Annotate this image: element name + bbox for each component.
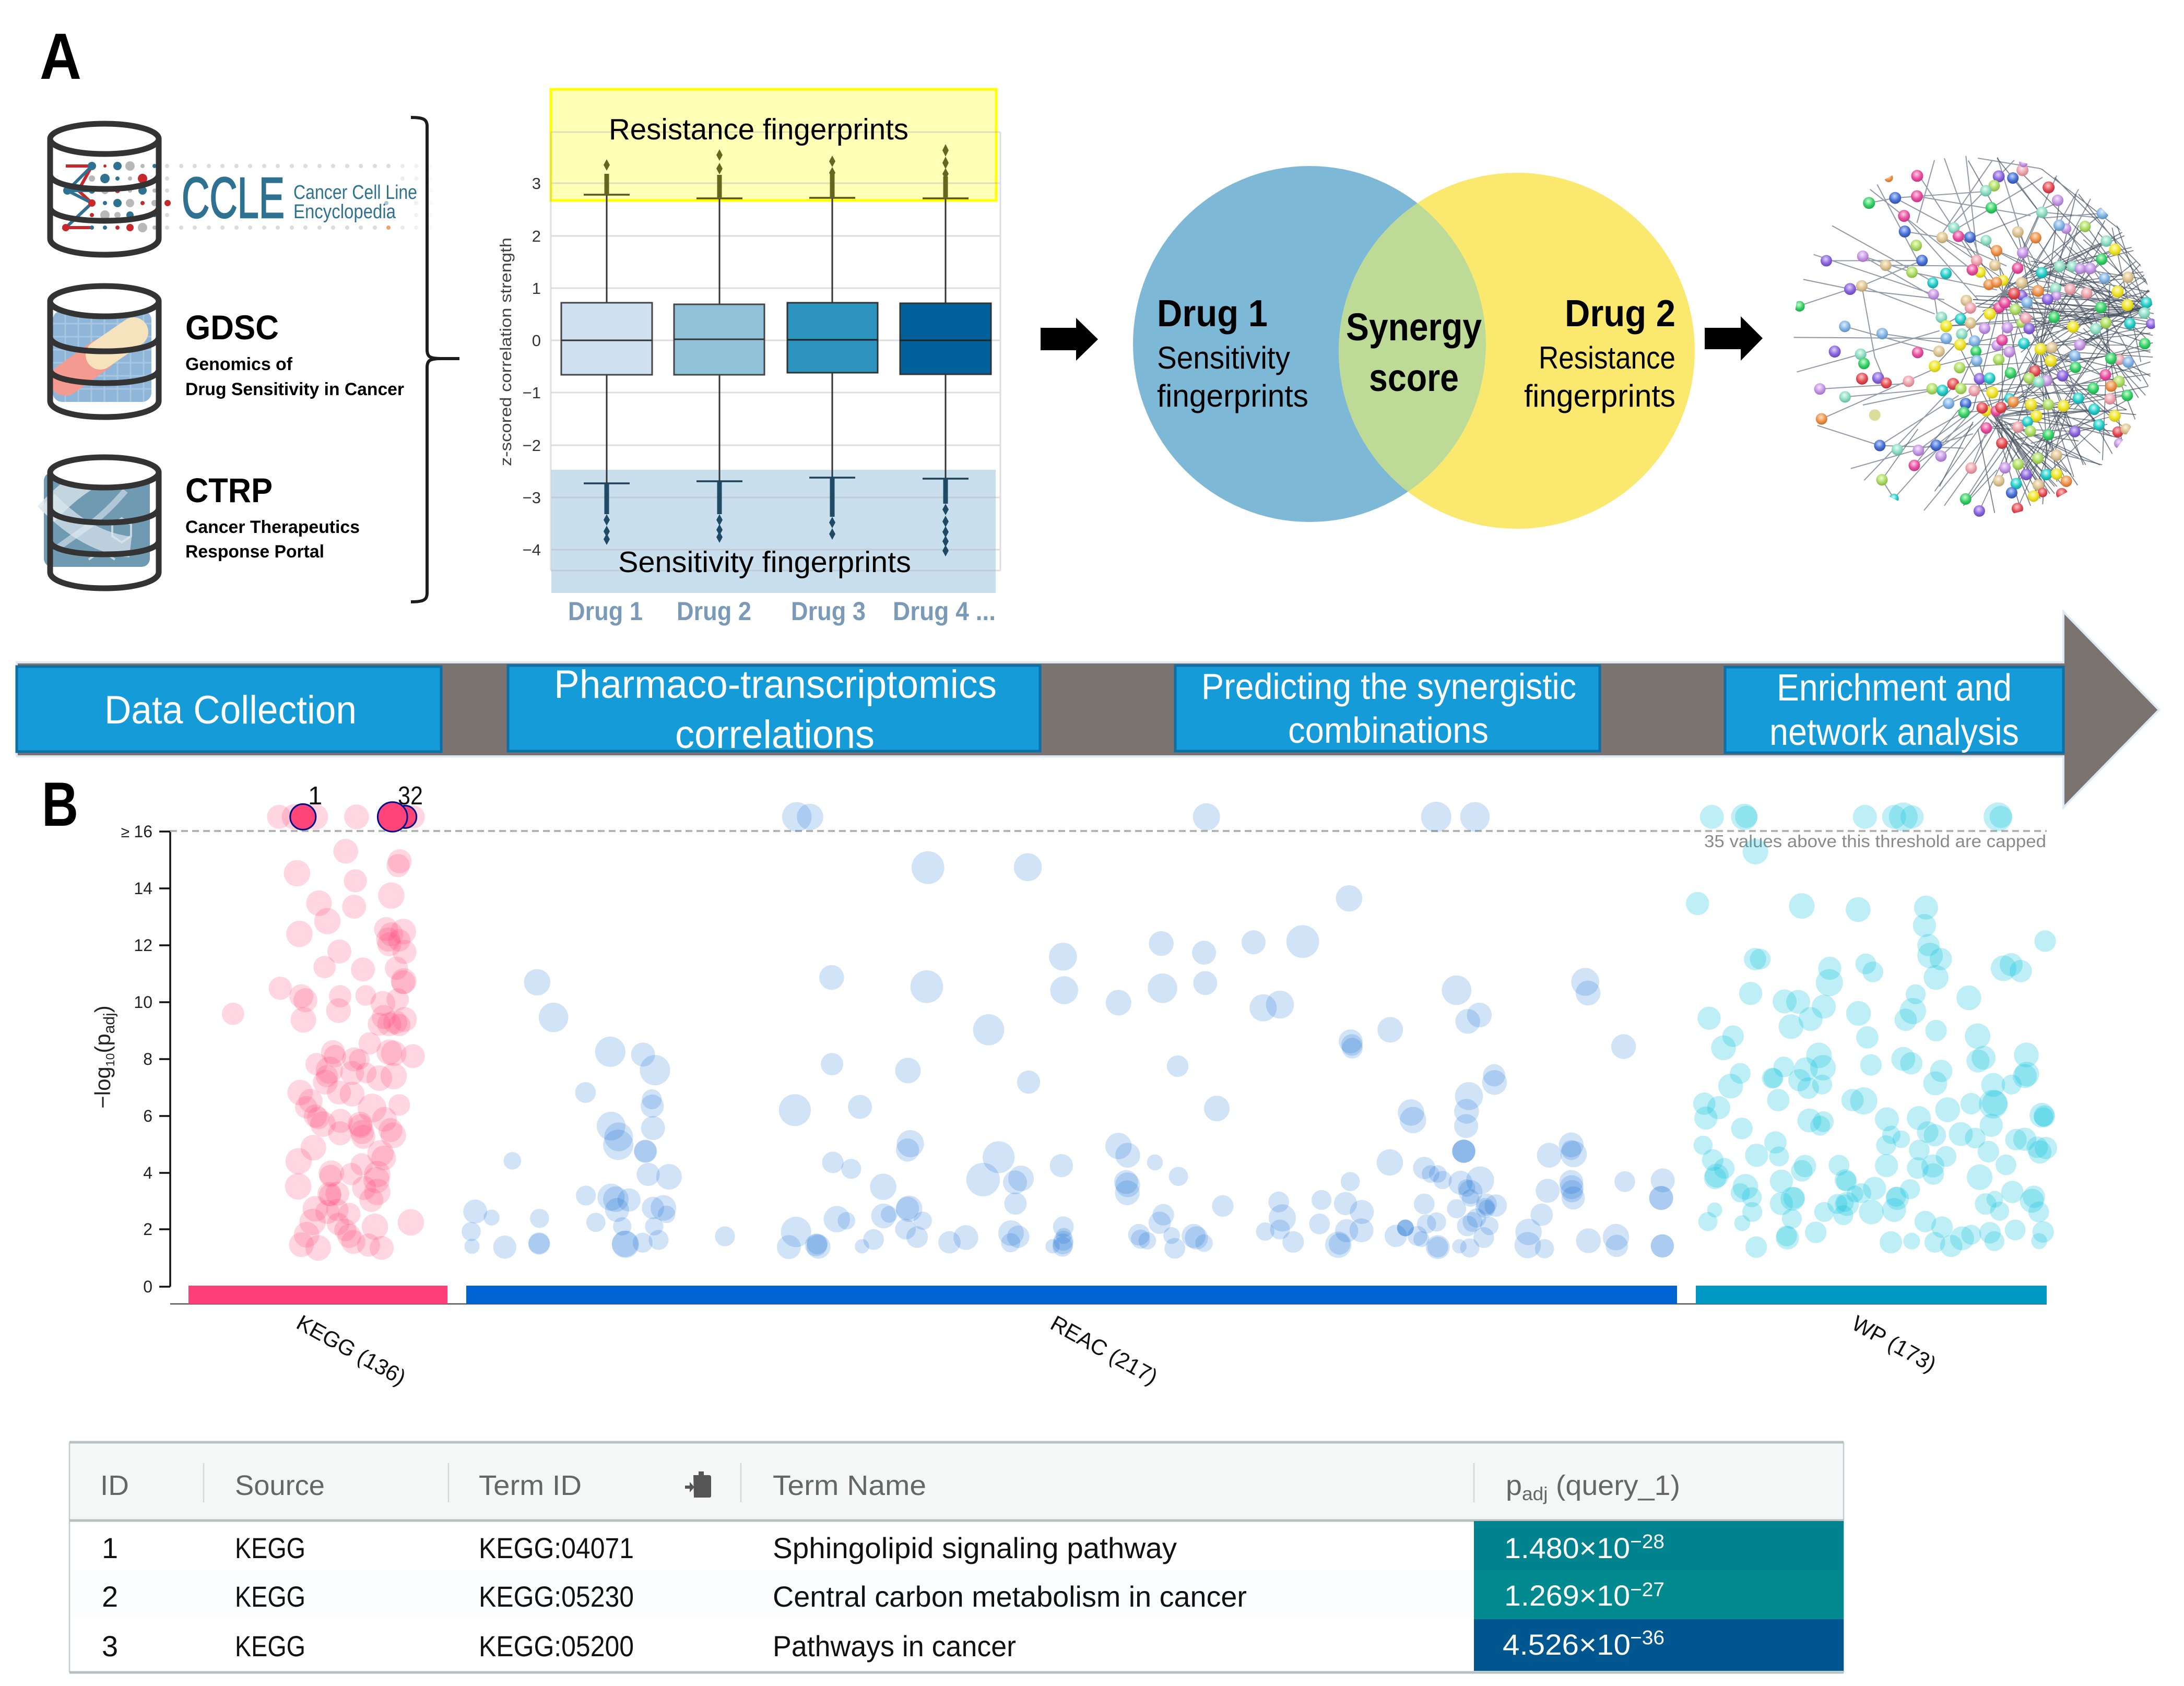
p-value cell row 1: 1.480×10: [1504, 1531, 1630, 1564]
REAC points, middle: [805, 803, 1430, 1258]
y axis tick labels: 0: [532, 331, 541, 350]
table header row: (query_1): [1548, 1470, 1680, 1501]
x axis drug labels: Drug 3: [791, 597, 866, 626]
synergy score label: score: [1369, 356, 1459, 399]
row 1: [102, 1531, 1177, 1564]
drug 1 label: Sensitivity: [1157, 340, 1290, 375]
highlighted row background: [69, 1570, 1474, 1618]
capped threshold line: [170, 830, 2047, 832]
x label: REAC: REAC (217): [1047, 1311, 1162, 1390]
y axis tick labels: −4: [523, 541, 541, 559]
y axis: 8: [143, 1050, 152, 1068]
row 1: Sphingolipid signaling pathway: [773, 1531, 1177, 1564]
drug 2 label: Resistance: [1539, 340, 1675, 375]
p-value cell row 2: 1.269×10: [1504, 1579, 1630, 1612]
synergy overlap: [1339, 203, 1486, 492]
step: enrichment and network analysis: Enrichment and: [1777, 667, 2012, 709]
drug 2 circle: [1339, 173, 1695, 529]
step: data collection: [17, 667, 441, 752]
drug 1 label: fingerprints: [1157, 378, 1308, 413]
step: enrichment and network analysis: [1725, 667, 2063, 753]
p-value cell row 3: 4.526×10: [1503, 1628, 1631, 1661]
REAC points, right: [1413, 802, 1675, 1259]
y axis title: adj: [101, 1013, 118, 1034]
box: drug 1: [561, 303, 652, 375]
table header row: adj: [1522, 1483, 1548, 1504]
panel label B: B: [42, 769, 78, 839]
arrow: venn to network: [1705, 316, 1763, 361]
table header row: p: [1506, 1470, 1521, 1501]
row 2: 2: [102, 1580, 118, 1613]
icon: GDSC pill image: [53, 311, 151, 402]
icon: CCLE dotted logo background: [62, 161, 432, 232]
y axis: 6: [143, 1107, 152, 1125]
row 3: 3: [102, 1630, 118, 1663]
x axis drug labels: Drug 2: [677, 597, 751, 626]
panel label A: A: [40, 20, 81, 93]
p-value cell row 3: −36: [1630, 1627, 1664, 1649]
drug 2 label: fingerprints: [1524, 378, 1675, 413]
panel: data sources: [44, 117, 459, 602]
table header row: [100, 1470, 1680, 1504]
CCLE full name line 2: Encyclopedia: [293, 201, 396, 223]
icon: CTRP database cylinder: [50, 457, 159, 588]
y axis title: (p: [90, 1034, 115, 1053]
y axis tick labels: 2: [532, 227, 541, 245]
row 2: Central carbon metabolism in cancer: [773, 1580, 1247, 1613]
REAC points: [462, 802, 823, 1259]
drug 1 label: Drug 1: [1157, 293, 1268, 335]
box: drug 2: [674, 304, 764, 375]
sensitivity fingerprints highlight: [551, 470, 996, 593]
y axis: [121, 822, 170, 1296]
workflow banner arrow: [17, 612, 2159, 808]
y axis: 12: [134, 936, 152, 955]
chart: enrichment Manhattan plot: [90, 782, 2057, 1390]
venn diagram: synergy score: [1133, 166, 1695, 529]
x axis drug labels: Drug 1: [568, 597, 643, 626]
CTRP full name line 1: Cancer Therapeutics: [185, 517, 360, 537]
source bar: WP: [1696, 1286, 2047, 1304]
p-value cell row 2: [1474, 1570, 1844, 1619]
y axis: ≥ 16: [121, 822, 152, 841]
table header row: Source: [235, 1470, 325, 1501]
y axis title: z-scored correlation strength: [497, 238, 515, 466]
arrow: boxplot to venn: [1041, 318, 1098, 361]
row 2: KEGG:05230: [479, 1580, 634, 1613]
results table: [69, 1442, 1844, 1672]
p-value cell row 1: −28: [1630, 1531, 1664, 1553]
CCLE full name line 1: Cancer Cell Line: [293, 182, 417, 204]
whiskers and outliers: [584, 144, 969, 556]
CTRP database: [44, 457, 360, 588]
y axis: 4: [143, 1163, 152, 1182]
icon: CTRP DNA image: [44, 472, 150, 567]
icon: copy clipboard: [685, 1471, 711, 1498]
y axis tick labels: −1: [523, 384, 541, 402]
synergy score label: Synergy: [1346, 305, 1482, 349]
x label: KEGG: KEGG (136): [292, 1310, 410, 1390]
drug 2 label: [1524, 293, 1675, 413]
term labels above highlighted points: 1: [308, 782, 322, 810]
x axis drug labels: Drug 4 ...: [893, 597, 996, 626]
y axis: 10: [134, 993, 152, 1012]
step: enrichment and network analysis: network analysis: [1769, 711, 2019, 753]
GDSC heading: GDSC: [185, 308, 279, 347]
synergy score label: [1346, 305, 1482, 399]
drug 2 label: Drug 2: [1565, 293, 1675, 335]
source bar: REAC: [466, 1286, 1677, 1304]
CTRP full name line 2: Response Portal: [185, 542, 324, 562]
bracket joining data sources: [411, 117, 459, 602]
KEGG points: [222, 804, 425, 1261]
GDSC full name line 1: Genomics of: [185, 354, 293, 374]
term labels above highlighted points: 32: [398, 782, 423, 810]
table header background: [69, 1442, 1844, 1521]
WP points: [1686, 802, 2057, 1258]
step: predicting the synergistic combinations: [1175, 666, 1600, 751]
resistance fingerprints highlight: [551, 89, 996, 200]
table header row: Term Name: [773, 1470, 926, 1501]
step: predicting the synergistic combinations: combinations: [1288, 710, 1489, 751]
y axis: 2: [143, 1220, 152, 1239]
source bar: KEGG: [188, 1286, 447, 1304]
p-value cell row 1: [1474, 1521, 1844, 1570]
y axis: 14: [134, 879, 152, 898]
row 1: 1: [102, 1531, 118, 1564]
row 3: KEGG: [235, 1630, 305, 1663]
row 1: KEGG:04071: [479, 1531, 634, 1564]
GDSC full name line 2: Drug Sensitivity in Cancer: [185, 379, 404, 399]
term labels above highlighted points: [308, 782, 423, 810]
x axis drug labels: [568, 597, 996, 626]
label: sensitivity fingerprints: Sensitivity fingerprints: [618, 545, 911, 579]
p-value cell row 3: [1474, 1619, 1844, 1671]
row 2: [102, 1580, 1247, 1613]
y axis title: 10: [103, 1053, 117, 1066]
box: drug 4: [900, 303, 991, 374]
table header row: ID: [100, 1470, 129, 1501]
y axis tick labels: [523, 174, 541, 559]
y axis title: ): [90, 1005, 115, 1013]
drug 1 circle: [1133, 166, 1486, 522]
step: pharmaco-transcriptomics correlations: correlations: [675, 713, 875, 757]
step: pharmaco-transcriptomics correlations: Pharmaco-transcriptomics: [554, 662, 997, 707]
row 2: KEGG: [235, 1580, 305, 1613]
step: data collection: Data Collection: [104, 688, 357, 732]
y axis tick labels: 3: [532, 174, 541, 193]
x label: WP: WP (173): [1848, 1311, 1941, 1377]
CTRP heading: CTRP: [185, 471, 273, 509]
box: drug 3: [787, 303, 878, 373]
chart: boxplot of z-scored correlation strength: [497, 89, 1000, 626]
icon: CCLE database cylinder: [50, 124, 159, 255]
step: pharmaco-transcriptomics correlations: [508, 662, 1040, 757]
row 1: KEGG: [235, 1531, 305, 1564]
y axis tick labels: −2: [523, 436, 541, 455]
GDSC database: [50, 286, 404, 417]
drug 1 label: [1157, 293, 1308, 413]
row 3: Pathways in cancer: [773, 1630, 1016, 1663]
banner arrow shape: [17, 612, 2159, 808]
y axis title: −log: [90, 1066, 115, 1109]
y axis: 0: [143, 1277, 152, 1296]
step: predicting the synergistic combinations: Predicting the synergistic: [1201, 666, 1576, 707]
highlighted KEGG terms 1, 2, 3: [290, 802, 417, 832]
p-value cell row 2: −27: [1630, 1579, 1664, 1601]
row 3: KEGG:05200: [479, 1630, 634, 1663]
table header row: Term ID: [479, 1470, 582, 1501]
label: resistance fingerprints: Resistance fingerprints: [609, 113, 908, 146]
y axis tick labels: 1: [532, 279, 541, 298]
y axis tick labels: −3: [523, 489, 541, 507]
row 3: [102, 1630, 1016, 1663]
icon: GDSC database cylinder: [50, 286, 159, 417]
CCLE logo text: CCLE: [182, 166, 285, 230]
network graph: [1794, 156, 2156, 517]
threshold note: 35 values above this threshold are capped: [1704, 832, 2046, 851]
CCLE database: [50, 124, 432, 255]
x axis baseline: [170, 1303, 2047, 1304]
